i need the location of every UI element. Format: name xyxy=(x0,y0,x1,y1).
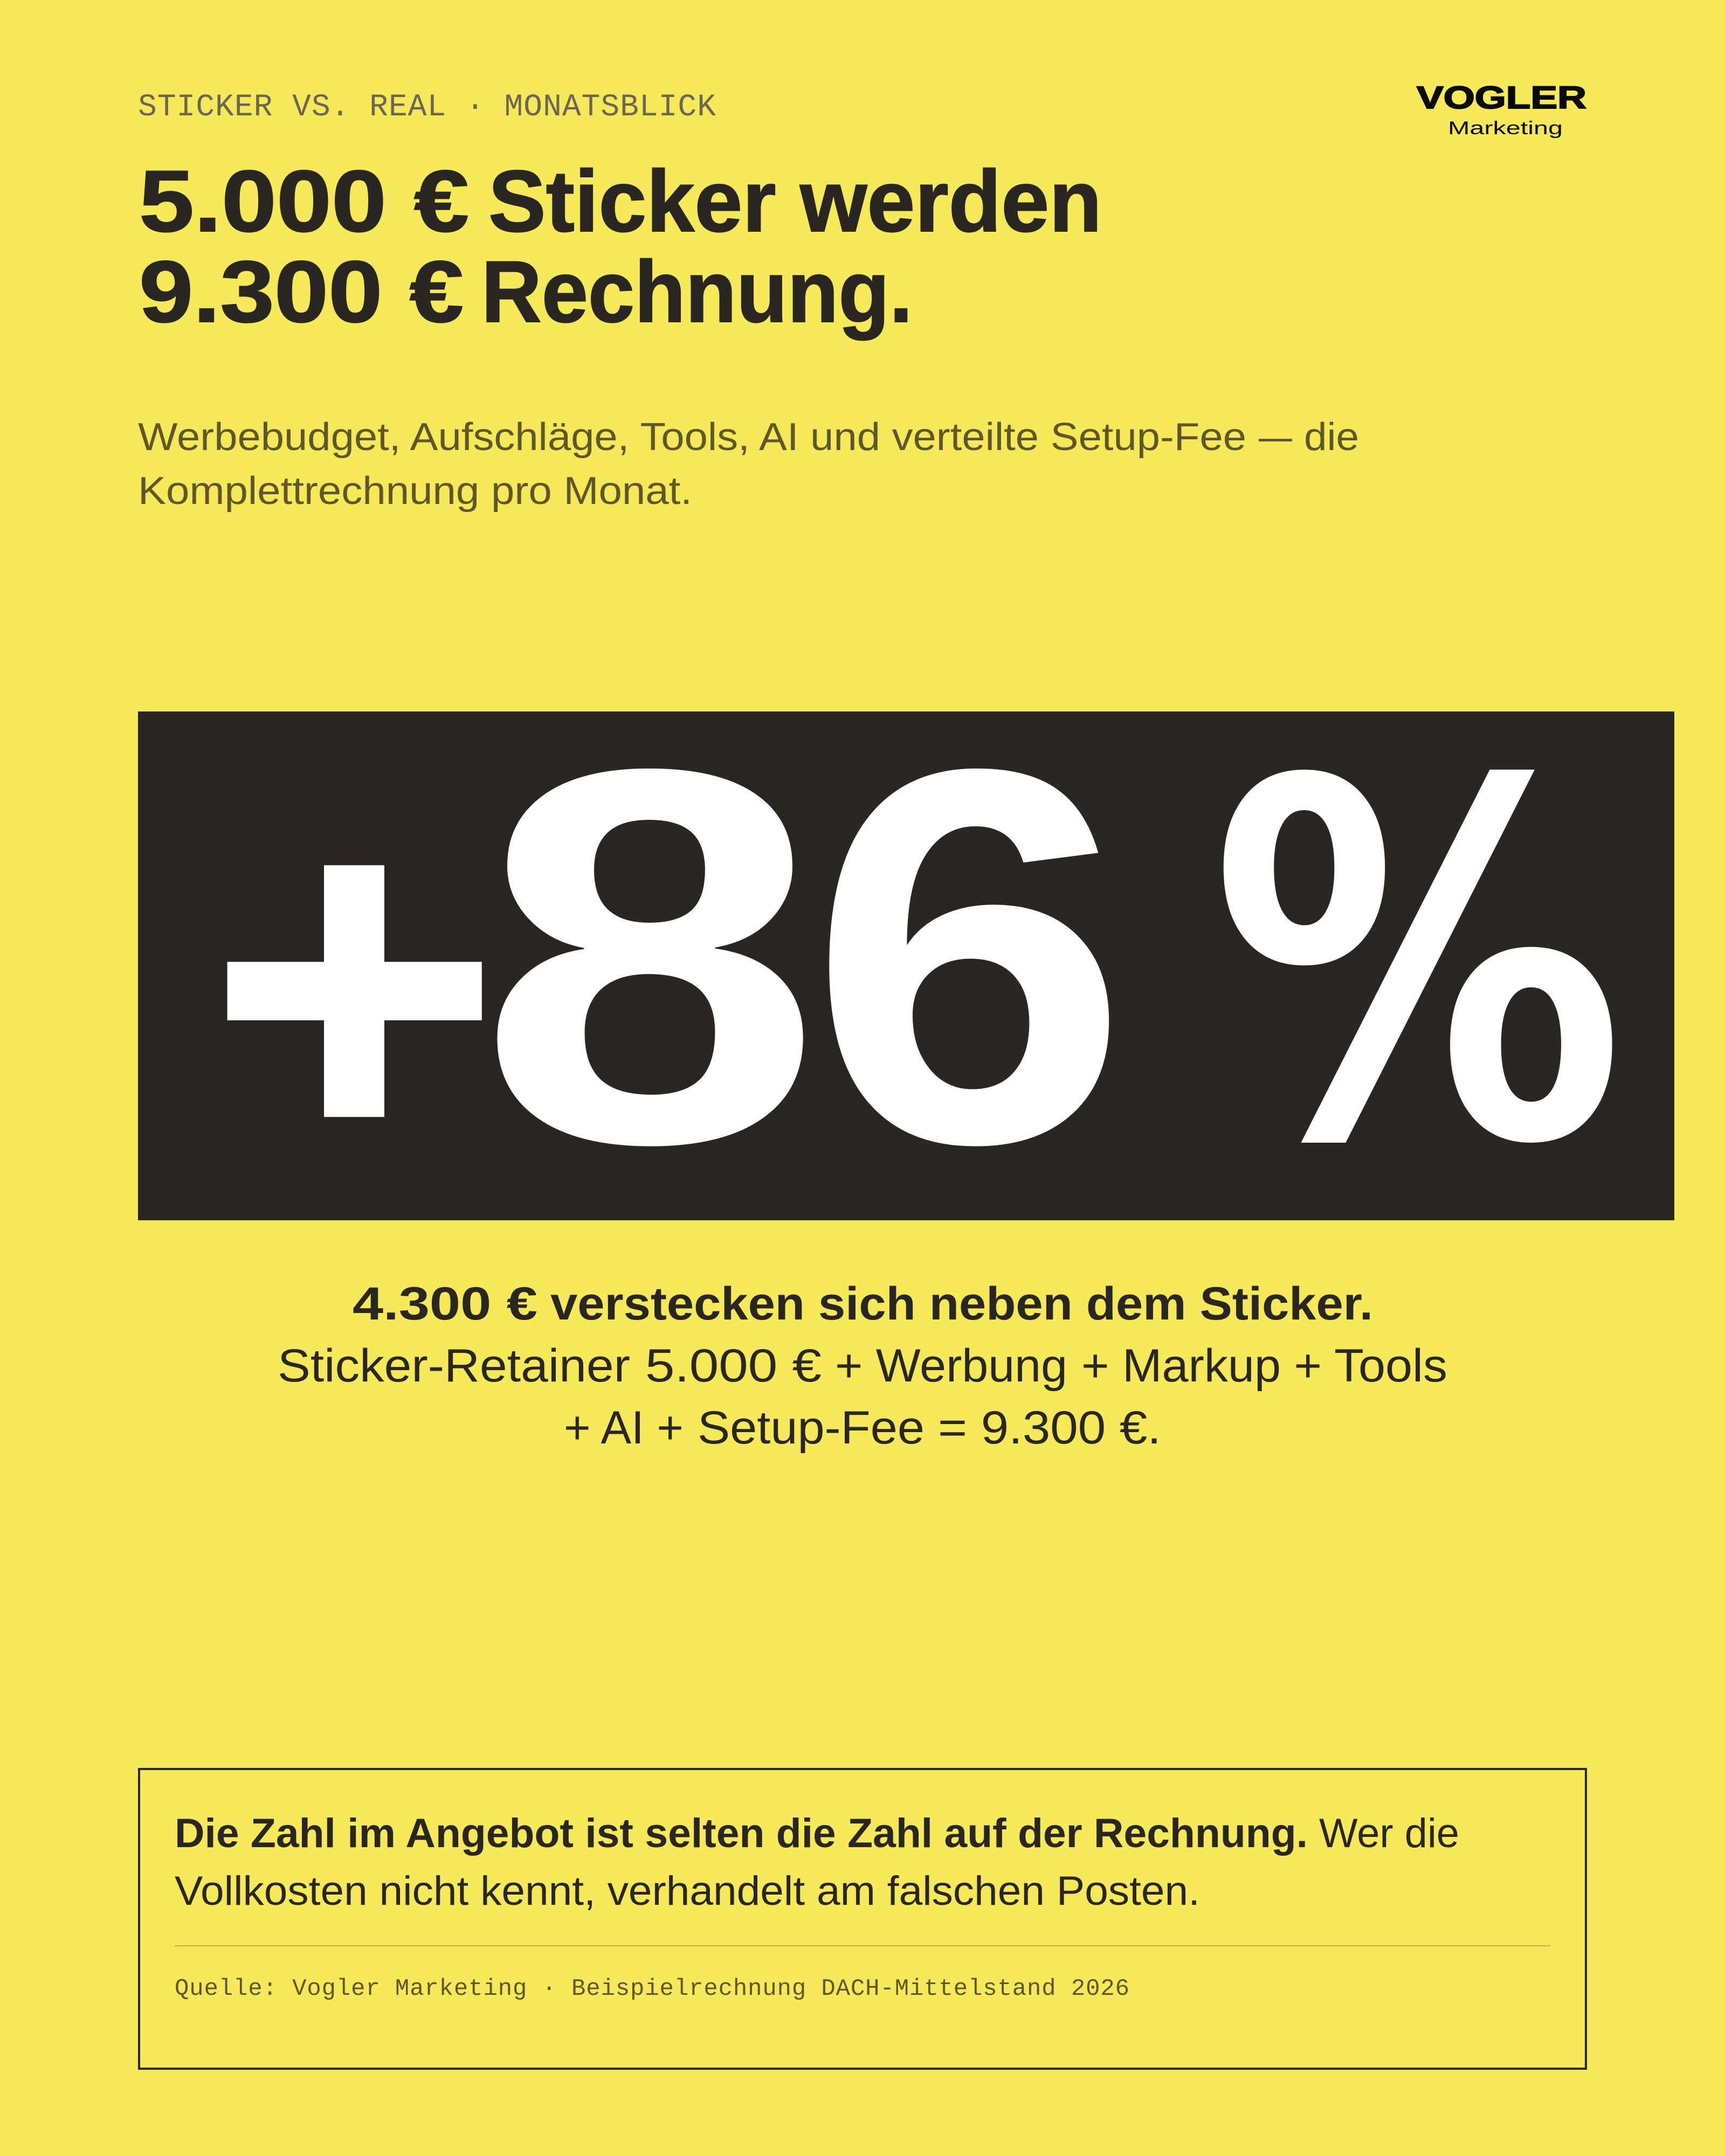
logo: Vogler Marketing: Marketing xyxy=(1448,118,1563,139)
takeaway text xyxy=(175,1811,1459,1914)
panel: takeaway box xyxy=(139,1769,1586,2069)
big stat value: 8 xyxy=(478,658,822,1254)
subtitle: die xyxy=(1304,416,1359,459)
subtitle: Werbebudget, Aufschläge, Tools, AI und verteilte Setup-Fee xyxy=(138,416,1246,459)
title: 9.300 € xyxy=(139,243,464,341)
logo: Vogler Marketing: VOGLER xyxy=(1417,80,1586,115)
takeaway text: Die Zahl im Angebot ist selten die Zahl auf der Rechnung. xyxy=(175,1811,1308,1856)
big stat value: + xyxy=(209,713,499,1255)
caption under the stat: 5.000 € xyxy=(645,1340,822,1392)
caption under the stat xyxy=(278,1278,1447,1454)
caption under the stat: Setup-Fee xyxy=(698,1402,924,1454)
caption under the stat: + Werbung xyxy=(835,1340,1067,1392)
caption under the stat: = 9.300 €. xyxy=(938,1402,1161,1454)
caption under the stat: Sticker-Retainer xyxy=(278,1340,630,1392)
caption under the stat: 4.300 € xyxy=(353,1278,537,1330)
caption under the stat: + Markup + xyxy=(1081,1340,1322,1392)
caption under the stat: verstecken sich neben dem Sticker. xyxy=(550,1278,1373,1330)
takeaway text: Wer die xyxy=(1319,1811,1459,1856)
big stat value: 6 xyxy=(808,658,1130,1254)
title: Rechnung. xyxy=(481,243,913,341)
title xyxy=(139,153,1102,341)
source line: Quelle: Vogler Marketing · Beispielrechnung DACH-Mittelstand 2026 xyxy=(175,1975,1129,2002)
panel: big number +86 % xyxy=(138,658,1674,1255)
title: 5.000 € xyxy=(139,153,469,250)
subtitle xyxy=(138,416,1359,513)
title: Sticker werden xyxy=(488,153,1102,250)
big stat value: % xyxy=(1210,678,1625,1252)
caption under the stat: Tools xyxy=(1334,1340,1447,1392)
eyebrow label: STICKER VS. REAL · MONATSBLICK xyxy=(138,90,716,125)
takeaway text: Vollkosten nicht kennt, verhandelt am falschen Posten. xyxy=(175,1868,1200,1914)
big stat value xyxy=(209,658,1625,1255)
logo: Vogler Marketing xyxy=(1417,80,1586,139)
subtitle: — xyxy=(1259,416,1292,459)
subtitle: Komplettrechnung pro Monat. xyxy=(138,469,692,513)
caption under the stat: + AI + xyxy=(564,1402,684,1454)
